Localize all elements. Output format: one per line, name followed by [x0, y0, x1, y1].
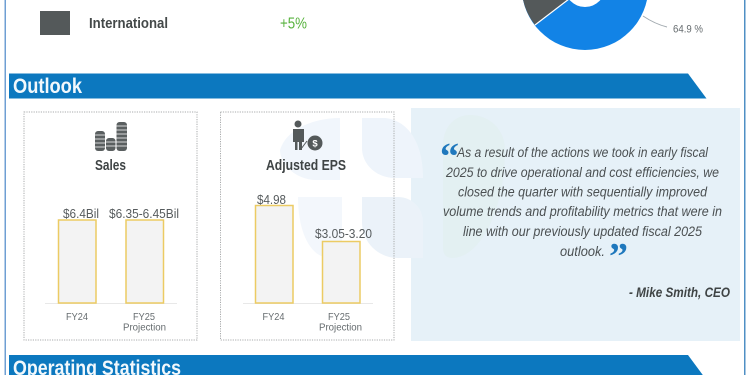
- bar chart: Sales: $6.35-6.45Bil: [109, 206, 179, 221]
- quote text: As a result of the actions we took in early fiscal: [456, 145, 709, 160]
- bar chart: Adjusted EPS: FY25: [328, 311, 350, 323]
- section header: Operating Statistics: [9, 355, 706, 375]
- quote panel background: [411, 108, 740, 341]
- closing quote mark: ”: [609, 236, 628, 278]
- bar chart: Sales: Projection: [123, 322, 166, 334]
- panel: Sales: [24, 112, 197, 340]
- section header: Outlook: Outlook: [13, 75, 82, 98]
- quote text: line with our previously updated fiscal 2025: [463, 224, 702, 239]
- quote text: closed the quarter with sequentially improved: [458, 184, 707, 200]
- bar chart: Adjusted EPS: FY24: [262, 311, 285, 323]
- bar chart: Sales: FY24: [66, 311, 88, 323]
- quote attribution: - Mike Smith, CEO: [629, 285, 730, 300]
- section header: Outlook: [9, 74, 706, 98]
- bar chart: Adjusted EPS: $3.05-3.20: [315, 226, 372, 241]
- icon: coin stacks: [95, 122, 127, 151]
- watermark logo: [280, 115, 505, 258]
- bar chart: Adjusted EPS: Projection: [319, 322, 362, 334]
- donut chart: [522, 0, 703, 50]
- panel: Adjusted EPS: [220, 112, 394, 340]
- opening quote mark: “: [440, 136, 459, 178]
- legend row: International: [40, 11, 307, 35]
- panel heading: Adjusted EPS: [266, 158, 346, 174]
- bar chart: Sales: [45, 206, 179, 334]
- donut value label: 64.9 %: [673, 24, 703, 36]
- bar chart: Sales: $6.4Bil: [63, 206, 99, 221]
- legend change value: +5%: [280, 16, 307, 32]
- quote text: 2025 to drive operational and cost efficiencies, we: [445, 165, 719, 180]
- bar chart: Sales: FY25: [133, 311, 155, 323]
- icon: person with dollar coin: [293, 120, 322, 150]
- icon: person with dollar coin: $: [312, 138, 318, 150]
- bar chart: Adjusted EPS: [243, 192, 373, 334]
- quote text: outlook.: [560, 244, 605, 259]
- quote text: [440, 136, 722, 278]
- quote text: volume trends and profitability metrics that were in: [443, 204, 722, 219]
- legend label: International: [89, 16, 168, 32]
- bar chart: Adjusted EPS: $4.98: [257, 192, 286, 207]
- panel heading: Sales: [95, 158, 126, 174]
- legend swatch: [40, 11, 70, 35]
